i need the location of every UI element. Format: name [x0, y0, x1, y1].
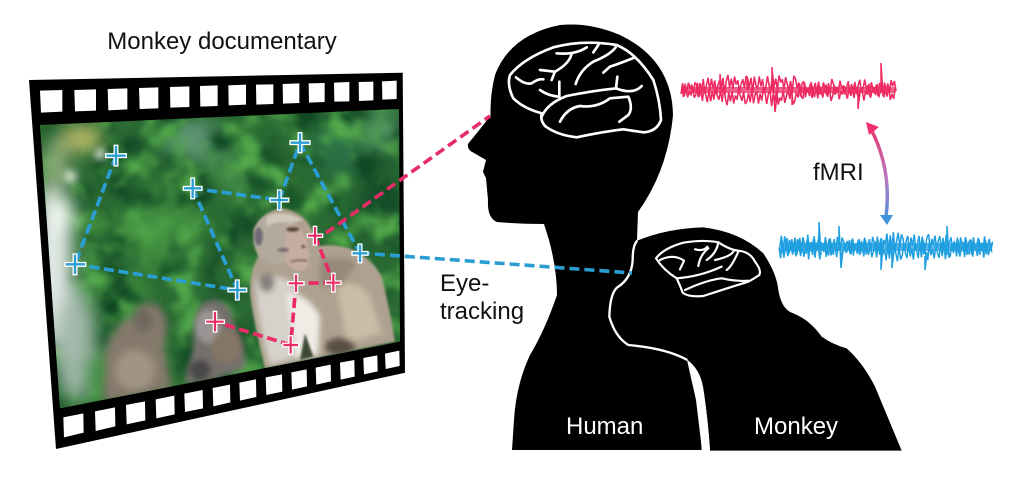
label: Eye-tracking: Eye- — [440, 270, 489, 297]
gap between human and monkey — [687, 360, 710, 451]
long gaze line to human — [326, 116, 490, 233]
eye-tracking gaze lines human (pink) — [215, 236, 333, 345]
monkey silhouette — [609, 227, 902, 451]
label: Human: Human — [566, 413, 643, 440]
film strip panel — [29, 73, 407, 449]
fMRI double-headed arrow — [866, 122, 893, 225]
fixation crosses — [64, 132, 369, 355]
photo of monkeys — [33, 103, 407, 413]
blurred middle monkey — [185, 299, 245, 383]
fMRI trace monkey — [779, 218, 993, 276]
blurred rear monkey — [103, 303, 172, 400]
label: Eye-tracking: tracking — [440, 298, 524, 325]
long gaze line to monkey — [360, 253, 632, 273]
human brain outline — [509, 43, 661, 137]
film frame — [29, 73, 405, 449]
film sprocket holes top — [40, 81, 397, 113]
human silhouette — [468, 24, 702, 450]
eye-tracking gaze lines monkey (blue) — [75, 143, 360, 290]
blue fixation crosses — [64, 132, 369, 301]
title: Monkey documentary — [107, 28, 337, 55]
monkey brain outline — [656, 241, 760, 296]
label: Monkey: Monkey — [754, 413, 838, 440]
fMRI trace human — [681, 63, 896, 113]
main monkey — [250, 208, 395, 368]
label: fMRI: fMRI — [813, 159, 864, 186]
pink fixation crosses — [205, 226, 342, 355]
film sprocket holes bottom — [63, 351, 400, 437]
